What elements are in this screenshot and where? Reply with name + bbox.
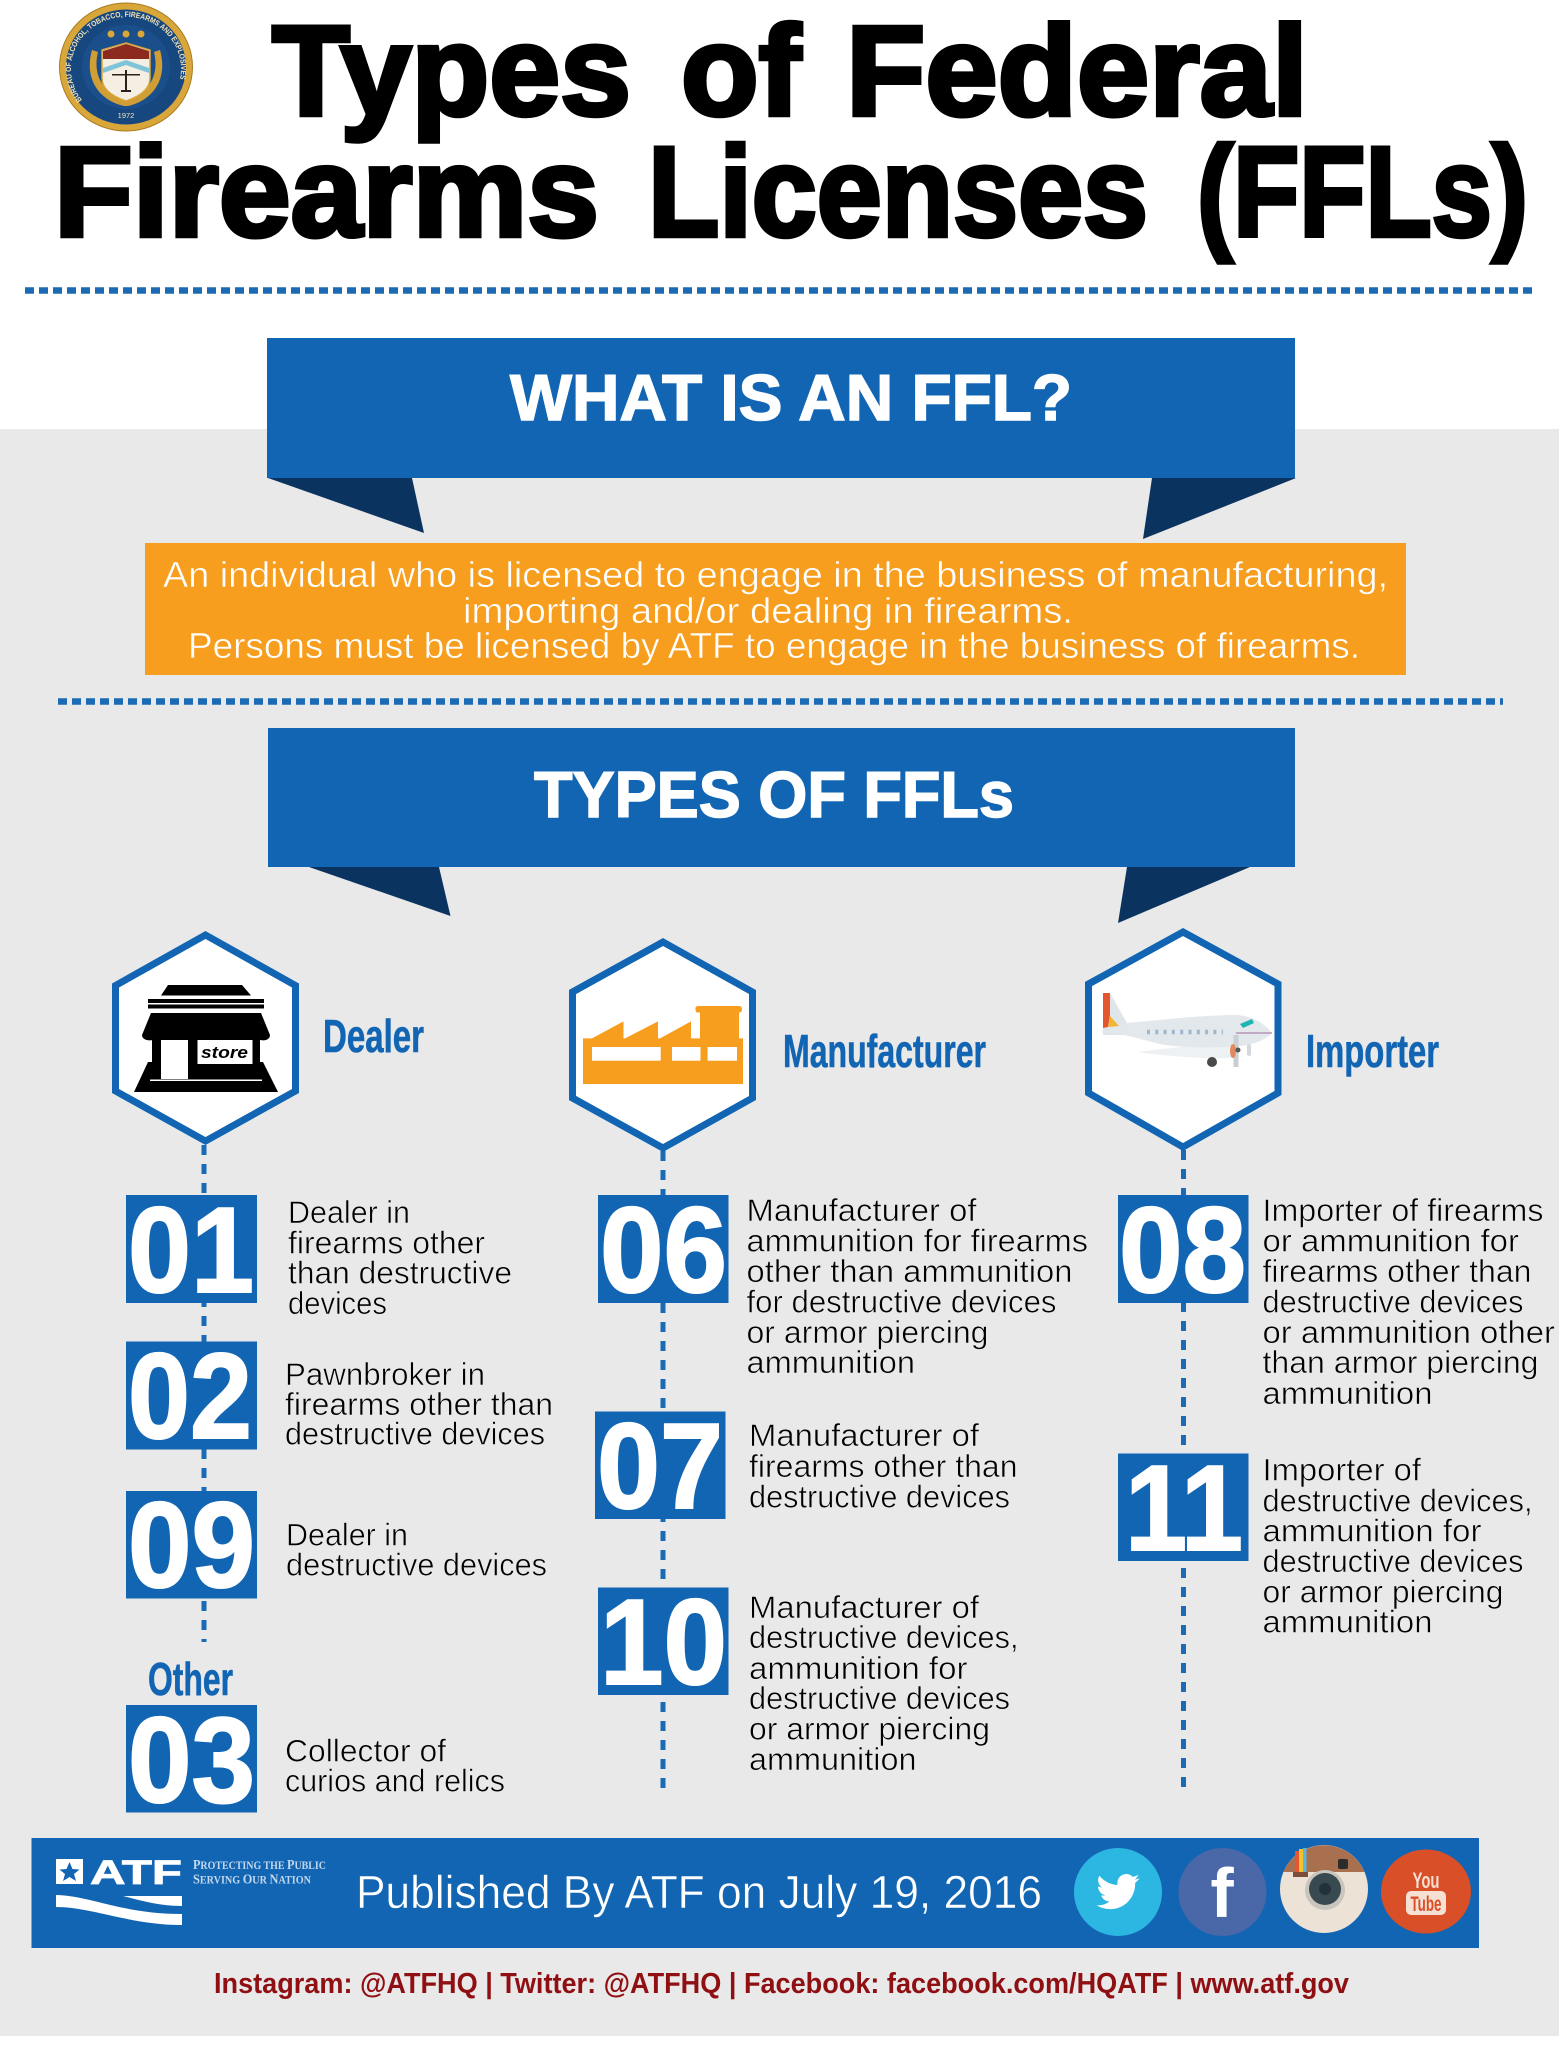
item 02 xyxy=(126,1328,553,1464)
title: Licenses xyxy=(648,121,1148,264)
item 06 xyxy=(598,1182,1088,1380)
panel: definition: importing and/or dealing in firearms. xyxy=(463,590,1073,631)
item 02: destructive devices xyxy=(285,1416,545,1452)
item 11: destructive devices, xyxy=(1262,1482,1532,1518)
item 11: ammunition xyxy=(1262,1604,1432,1640)
item 07: destructive devices xyxy=(749,1478,1010,1514)
item 10: 10 xyxy=(600,1574,727,1710)
banner: types of FFLs xyxy=(268,728,1295,923)
item 09: Dealer in xyxy=(286,1516,408,1552)
tagline: PROTECTING THE PUBLIC xyxy=(193,1858,326,1873)
icon: youtube: You xyxy=(1412,1868,1440,1893)
panel: definition: Persons must be licensed by ATF to engage in the business of firearms. xyxy=(188,625,1360,666)
item 01: devices xyxy=(288,1285,387,1321)
item 03: curios and relics xyxy=(285,1762,505,1798)
banner: what is an FFL: WHAT IS AN FFL? xyxy=(510,361,1072,434)
title xyxy=(54,0,1528,264)
column: dealer xyxy=(116,935,553,1828)
icon: ATF seal: BUREAU OF ALCOHOL, TOBACCO, FIREARMS AND EXPLOSIVES xyxy=(66,12,186,103)
item 11: 11 xyxy=(1125,1440,1243,1576)
title: Types xyxy=(272,0,631,143)
item 10: destructive devices xyxy=(749,1680,1010,1716)
icon: ATF seal: 1972 xyxy=(118,111,134,120)
item 10: or armor piercing xyxy=(749,1710,990,1746)
item 08: or ammunition other xyxy=(1262,1314,1555,1350)
item 01: than destructive xyxy=(288,1254,512,1290)
item 03: Collector of xyxy=(285,1732,446,1768)
heading: manufacturer: Manufacturer xyxy=(783,1025,986,1077)
item 11: ammunition for xyxy=(1262,1512,1482,1548)
heading: importer: Importer xyxy=(1306,1025,1439,1077)
item 11: destructive devices xyxy=(1262,1543,1524,1579)
item 10: destructive devices, xyxy=(749,1619,1018,1655)
item 02: firearms other than xyxy=(285,1386,553,1422)
panel: definition: An individual who is licensed to engage in the business of manufacturing, xyxy=(163,554,1388,595)
item 11: or armor piercing xyxy=(1262,1574,1504,1610)
column: importer xyxy=(1088,932,1555,1640)
item 10: ammunition xyxy=(749,1741,916,1777)
item 06: other than ammunition xyxy=(746,1253,1072,1289)
item 03 xyxy=(126,1692,505,1828)
tagline xyxy=(193,1858,326,1888)
item 11 xyxy=(1118,1440,1532,1640)
item 08: destructive devices xyxy=(1262,1284,1524,1320)
item 07: 07 xyxy=(597,1398,723,1534)
item 07 xyxy=(595,1398,1018,1534)
item 08: 08 xyxy=(1119,1182,1246,1318)
item 02: Pawnbroker in xyxy=(285,1356,485,1392)
item 01 xyxy=(126,1182,512,1321)
item 06: for destructive devices xyxy=(746,1284,1056,1320)
icon: facebook: f xyxy=(1210,1854,1234,1932)
item 10: Manufacturer of xyxy=(749,1589,979,1625)
title: of xyxy=(681,0,801,143)
published line: Published By ATF on July 19, 2016 xyxy=(356,1866,1042,1918)
item 01: Dealer in xyxy=(288,1194,410,1230)
contact line: Instagram: @ATFHQ | Twitter: @ATFHQ | Facebook: facebook.com/HQATF | www.atf.gov xyxy=(214,1968,1349,2000)
item 08: firearms other than xyxy=(1262,1253,1532,1289)
column: manufacturer xyxy=(572,942,1088,1777)
icon: instagram xyxy=(1280,1845,1368,1933)
title: Firearms xyxy=(54,121,599,264)
item 08: or ammunition for xyxy=(1262,1222,1519,1258)
item 08: than armor piercing xyxy=(1262,1344,1538,1380)
item 10 xyxy=(598,1574,1018,1777)
tagline: SERVING OUR NATION xyxy=(193,1872,312,1888)
item 09: destructive devices xyxy=(286,1546,547,1582)
heading: dealer: Dealer xyxy=(323,1010,424,1062)
heading: other: Other xyxy=(148,1653,233,1705)
icon: airplane hexagon xyxy=(1088,932,1278,1147)
item 06: ammunition for firearms xyxy=(746,1222,1088,1258)
banner: types of FFLs: TYPES OF FFLs xyxy=(534,758,1014,831)
item 08 xyxy=(1118,1182,1555,1411)
item 10: ammunition for xyxy=(749,1650,968,1686)
title: Federal xyxy=(846,0,1308,143)
item 03: 03 xyxy=(128,1692,255,1828)
item 02: 02 xyxy=(128,1328,252,1464)
item 08: Importer of firearms xyxy=(1262,1192,1544,1228)
item 06: or armor piercing xyxy=(746,1314,988,1350)
icon: ATF seal xyxy=(59,2,193,132)
icon: store hexagon: store xyxy=(201,1043,248,1062)
icon: facebook xyxy=(1178,1848,1266,1936)
icon: youtube xyxy=(1381,1850,1471,1934)
item 06: Manufacturer of xyxy=(746,1192,977,1228)
icon: twitter xyxy=(1074,1848,1162,1936)
panel: definition xyxy=(145,543,1406,675)
icon: youtube: Tube xyxy=(1410,1893,1442,1916)
icon: store hexagon xyxy=(116,935,296,1141)
icon: ATF logo: ATF xyxy=(90,1854,182,1892)
banner: what is an FFL xyxy=(267,338,1296,539)
footer banner xyxy=(32,1838,1479,1948)
item 07: firearms other than xyxy=(749,1448,1018,1484)
item 01: 01 xyxy=(128,1182,254,1318)
icon: factory hexagon xyxy=(572,942,752,1148)
icon: ATF logo xyxy=(56,1854,182,1925)
item 01: firearms other xyxy=(288,1224,485,1260)
item 07: Manufacturer of xyxy=(749,1417,979,1453)
item 09: 09 xyxy=(128,1477,255,1613)
item 08: ammunition xyxy=(1262,1375,1432,1411)
item 09 xyxy=(126,1477,547,1613)
item 06: 06 xyxy=(600,1182,727,1318)
item 06: ammunition xyxy=(746,1344,915,1380)
item 11: Importer of xyxy=(1262,1452,1421,1488)
